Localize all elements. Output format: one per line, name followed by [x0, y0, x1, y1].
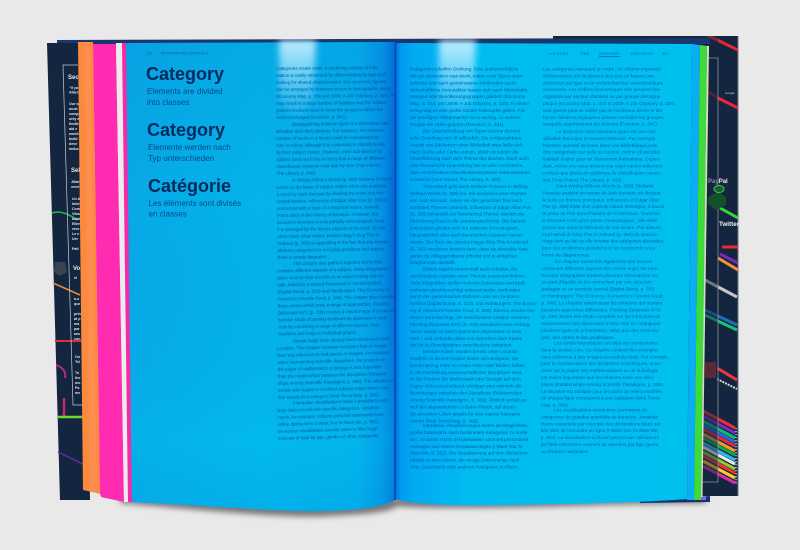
text column: english: bear any reference to real places or images. For instance, — [277, 350, 391, 358]
text column: english: by their subject matter. However, even sub-division by — [276, 149, 383, 155]
text column: german: Gruppe die Opfer gehören (Function, S. 341). — [410, 122, 505, 127]
back page: left side map — [47, 43, 90, 500]
text fragments: Jilian — [71, 180, 80, 184]
text fragments: mo — [75, 381, 81, 385]
text column: german: reiche Studie zu falsch parkenden Diplomaten in New — [410, 329, 522, 334]
text column: french: confuse que plusieurs systèmes de classification coexis- — [542, 170, 662, 176]
text column: french: un pied d'égalité en les connectant par une structure — [542, 280, 652, 286]
text column: french: surtout aux aspects littéraires de son œuvre. Par ailleurs, — [542, 225, 662, 231]
text fragments: Sel — [71, 168, 80, 174]
text column: german: Papier nicht entscheidend, wichtiger sind vielmehr die — [410, 384, 522, 389]
text column: german: die beteiligten Militärmächte ist es wichtig, zu welcher — [410, 115, 521, 120]
heading group: german: Elemente werden nach — [148, 143, 231, 152]
text column: french: l'énorme quantité de livres dans une bibliothèque peut — [543, 143, 657, 149]
text fragments: at p — [74, 317, 81, 321]
text column: english: online dating sites (I Want You To Want Me, p. 352). — [278, 419, 379, 427]
text fragments: Albert — [69, 90, 80, 94]
text column: german: lung jedoch gliedert sich nur teilweise chronologisch, — [410, 226, 519, 231]
text column: french: est moins importante que les relations entre ces disci- — [541, 375, 655, 381]
text fragments: "If you — [69, 86, 80, 90]
text column: english: Location. This chapter contains examples that no longer — [277, 343, 388, 351]
text column: german: sche Einteilung und oft willkürlich. Die unübersehbare — [410, 135, 522, 140]
text column: german: Klassifizierung nach dem Thema des Buches. Doch auch — [410, 156, 529, 161]
text column: english: combine different aspects of a subject. Many infographics — [277, 266, 391, 273]
text column: german: zentralen Themen unterteilt. Influences of Edgar Allan Poe — [410, 205, 531, 210]
page edge: fore-edge strip — [687, 44, 700, 500]
text fragments: bank — [72, 217, 80, 221]
text column: english: (Digital Dump, p. 333) and Hamburgers: The Economy of — [278, 287, 390, 294]
text column: french: des sites de rencontre en ligne (I Want You To Want Me, — [541, 428, 659, 434]
text fragments: a.o — [74, 297, 80, 301]
text column: english: side, linked by a shared framework or central symbol — [277, 280, 381, 287]
text fragments: feedb — [69, 122, 79, 126]
navigation header — [549, 52, 669, 57]
text column: german: Serien berücksichtigt, die verschiedene Ansätze vereinen. — [410, 315, 530, 320]
text column: german: Interaktive Visualisierungen bieten die Möglichkeit, — [423, 423, 528, 428]
map dimming overlay — [700, 36, 718, 496]
text column: french: Les visualisations interactives permettent de — [554, 408, 648, 414]
text fragments: deve — [69, 142, 77, 146]
text column: french: gies, des cartes et des graphiques. — [541, 335, 615, 341]
text column: german: gorien für Alltagsprobleme erfindet und in einfachen — [410, 253, 517, 258]
page edge: pale — [701, 46, 709, 497]
text column: french: ou d'autres catégories. — [541, 449, 589, 455]
text column: french: Dans Writing Without Words (p. 396), Stefanie — [556, 184, 654, 190]
text column: french: sans référence à des images ou endroits réels. Par exemple, — [541, 354, 669, 360]
text column: german: erlaubt es dem Nutzer, die riesige Datenmenge nach — [410, 458, 520, 463]
text column: english: Interactive visualisations make it possible to sort — [293, 398, 388, 406]
text column: english: may result in a large number of fatalities and the military — [276, 100, 387, 106]
text column: french: distinction par type et en recherchant les caractéristiques — [543, 80, 663, 86]
text fragments: world — [68, 132, 79, 136]
text column: french: dant, même une sous-division par sujet s'avère tellement — [542, 164, 663, 170]
text column: english: similar with regard to modified subway maps where each — [278, 385, 390, 393]
text column: german: verschiedene Aspekte eines Themas zusammenführen. — [410, 273, 525, 278]
text column: english: In Writing Without Words (p. 396) Stefanie Posavec — [292, 176, 394, 183]
text column: english: Harris, for example, collects personal statements from — [277, 412, 384, 420]
text fragments: aid e — [69, 127, 77, 131]
text column: german: Mentale Karten wurden bereits unter Location — [423, 349, 518, 354]
heading group: french: Les éléments sont divisés — [148, 199, 241, 208]
text fragments: con — [74, 337, 80, 341]
text fragments: Sec — [68, 75, 79, 81]
text fragments: Inter — [72, 202, 80, 206]
text fragments: build — [69, 137, 78, 141]
text column: german: Wirtschaftliche Kennzahlen lassen sich nach Wirtschafts- — [410, 87, 529, 92]
text column: german: nach Größe oder Farbe ordnen, üblich ist jedoch die — [410, 149, 519, 154]
text column: french: où chaque ligne correspond à une catégorie (Web Trend — [541, 396, 660, 402]
text fragments: the — [75, 376, 80, 380]
text column: german: Beziehungen zwischen den Disziplinen (Relationships — [410, 391, 523, 396]
text column: english: York by combining a range of different layouts, from — [278, 322, 380, 329]
book shadow — [120, 498, 706, 517]
text fragments: verei — [71, 185, 79, 189]
text fragments: Vo — [73, 266, 81, 272]
text column: german: eine thematische Unterteilung hat so viele Unschärfen, — [410, 163, 524, 168]
map lines: upper — [705, 35, 738, 389]
text column: german: Thematisch geht auch Stefanie Posavec in Writing — [423, 184, 528, 189]
text column: french: (p. 336) illustre une étude complète sur les infractions de — [541, 314, 661, 320]
text column: english: them in simple diagrams. — [278, 254, 327, 260]
text fragments: comp — [69, 112, 79, 116]
text column: french — [541, 66, 676, 455]
text fragments: ass — [74, 332, 80, 336]
text column: french: Une guerre peut se solder par de nombreux décès et les — [543, 108, 662, 114]
text column: french: pour des problèmes quotidiens et les représente sous — [542, 246, 656, 252]
label: PayPal: PayPal — [708, 179, 728, 185]
text column: english: a novel by Jack Kerouac by dividing the entire text into — [277, 190, 384, 197]
page edges: pink — [93, 44, 124, 502]
heading group: french: Catégorie — [148, 176, 231, 196]
text column: german: zweigen oder Bevölkerungsgruppen gliedern (Economy — [410, 94, 526, 99]
text column: french: tent (Your Friend, The Library, p. 400). — [542, 177, 623, 183]
text column: english: This chapter also gathers together works that — [293, 259, 383, 266]
text column: german: hauptsächlich aber nach literarischen Aspekten seines — [410, 233, 523, 238]
text column: english: central themes. Influences of Edgar Allan Poe (p. 358) is — [277, 197, 388, 204]
text column: german: stehen (Web Trend Map, S. 366). — [410, 418, 479, 423]
text column: english: other hand, what makes Jessica Hagy's blog This is — [277, 232, 380, 239]
text column: french: Posavec analyse un roman de Jack Kerouac en divisant — [542, 190, 661, 196]
heading group: english: Elements are divided — [147, 87, 223, 96]
text column: french: plines (Relationships Among Scientific Paradigms, p. 368). — [541, 382, 664, 388]
text column: german: my of America's Favorite Food, S. 346). Ebenso werden hier — [410, 308, 536, 313]
text fragments: Un Al — [72, 197, 81, 201]
text column: french: plusieurs approches différentes. Flocking Diplomats NYC — [541, 307, 662, 313]
text column: german: (S. 358) behandelt ein historisches Thema, nämlich die — [410, 212, 525, 217]
navigation header: HIERARCHY — [631, 52, 654, 56]
text column: english: the paper of mathematics or biology is less important — [278, 364, 382, 372]
text column: french: d'informations est facilement structuré en faisant une — [543, 73, 654, 79]
text column: german: Alter, Geschlecht oder anderen Kategorien zu filtern. — [410, 465, 519, 470]
text column: english — [276, 65, 400, 441]
label: Google: Google — [725, 91, 735, 95]
text fragments: par — [74, 327, 80, 331]
icon: red block — [705, 362, 716, 378]
panel: left page — [126, 40, 400, 511]
heading group: english: into classes — [147, 98, 189, 107]
text column: french: sition sur le papier des mathématiques ou de la biologie — [541, 368, 659, 374]
heading group: english: Category — [146, 64, 224, 84]
text column: french: catégoriser de grandes quantités de données. Jonathan — [541, 414, 659, 420]
text fragments: prin — [74, 312, 81, 316]
text column: english: place several data records on an equal footing side by — [277, 273, 384, 280]
text column: english: victims belonged (Function, p. 341). — [276, 114, 347, 120]
spine — [394, 42, 396, 500]
text column: french: Poe (p. 358) traite d'un sujet de nature historique, à savoir — [542, 204, 665, 210]
text column: french: Hagy tient au fait qu'elle invente des catégories abstraites — [542, 239, 664, 245]
text column: english: On-screen visualisation permits users to filter huge — [278, 426, 378, 434]
text column: english: classification systems exist side by side (Your Friend, — [276, 163, 381, 169]
page edges: orange — [78, 42, 101, 494]
text column: english: than the relationships between the disciplines (Relation- — [278, 371, 388, 379]
text fragments: Uer — [72, 237, 79, 241]
text fragments: Tel — [75, 360, 80, 364]
text column: english: size or colour, although it is customary to classify books — [276, 142, 386, 148]
page edges: white gap — [116, 43, 128, 502]
text fragments: me — [75, 391, 80, 395]
text column: french: tout l'attrait du blog This is Indexed (p. 360) de Jessica — [542, 232, 657, 238]
panel: right page — [395, 40, 709, 505]
text column: french: auxquels appartiennent les victimes (Function, p. 341). — [543, 122, 658, 128]
back page: right side map — [553, 35, 740, 496]
text fragments: Vikas — [72, 212, 81, 216]
text column: german: Flocking Diplomats NYC (S. 336) visualisiert eine umfang- — [410, 322, 531, 327]
text column: english: number of books in a library could be categorised by — [276, 135, 380, 141]
text column: german: In der Darstellung wissenschaftlicher Disziplinen etwa — [410, 370, 522, 375]
text column: english: looking for shared characteristics. Key economic figures — [276, 79, 387, 85]
text column: german: Viele Infografiken stellen mehrere Datensätze und Maß- — [410, 280, 527, 285]
text column: english: sification and often arbitrary. For instance, the immense — [276, 128, 386, 134]
text column: french: plusieurs types de présentation, telles que des chronolo- — [541, 328, 660, 334]
text column: french: phique (Economy Map, p. 334 et 2009: A Job Odyssey, p. 325). — [543, 101, 676, 107]
heading group: english — [146, 64, 224, 107]
text fragments: el — [74, 276, 77, 280]
text column: german: Anzahl von Büchern in einer Bibliothek etwa ließe sich — [410, 142, 523, 147]
text fragments: Com — [72, 207, 80, 211]
text column: german: Krieg mag es eine große Anzahl Todesopfer geben. Für — [410, 108, 526, 113]
page edges: orange highlight — [84, 42, 97, 493]
cover top edge — [57, 38, 710, 44]
map lines — [52, 212, 85, 465]
text column: german: von Jack Kerouac, indem sie den gesamten Text nach — [410, 198, 523, 203]
text column: german: durch den gemeinsamen Rahmen oder ein zentrales — [410, 294, 520, 299]
text column: english: Diplomats NYC (p. 336) creates a visual image of a compre- — [278, 308, 397, 315]
text column: french: breuses infographies mettent plusieurs informations sur — [542, 273, 659, 279]
text column: french: et Hamburgers: The Economy of America's Favorite Food, — [542, 294, 664, 300]
page edge: green — [694, 45, 707, 500]
page edges: pink strip — [122, 43, 133, 502]
text column: english: these series which unite a range of approaches. Flocking — [278, 301, 390, 308]
text fragments: indus — [69, 147, 79, 151]
text column: french: Map, p. 366). — [541, 403, 569, 409]
header: page number and section: 322 INFORMATION GRAPHICS — [146, 51, 209, 55]
text column: french: Les cartes heuristiques ont déjà été mentionnées — [554, 340, 658, 346]
text column: german: große Datensätze nach bestimmten Kategorien zu sortie- — [410, 430, 529, 435]
text column: german: Einordnung Poes in die Literaturgeschichte. Die Darstel- — [410, 219, 527, 224]
text column: german: Menge strukturiert man leicht, indem man Typen unter- — [410, 73, 524, 78]
map frame line — [702, 58, 718, 482]
text fragments: Ellen — [72, 222, 81, 226]
text column: french: stationnement des diplomates à New York en conjuguant — [541, 321, 661, 327]
text column: french: La distinction entre plusieurs types est une clas- — [556, 129, 658, 135]
text column: english: timelines and maps to individual graphs. — [278, 330, 357, 336]
text column: german: dass verschiedene Klassifikationssysteme nebeneinander — [410, 170, 531, 175]
text column: german: York – und verbindet dabei von Zeitreihen über Karten — [410, 336, 523, 341]
text frame — [63, 65, 85, 405]
text fragments: Le e — [72, 232, 79, 236]
glare — [279, 40, 316, 125]
text column: french: combinant différents aspects d'un même sujet. De nom- — [542, 266, 659, 272]
heading group: german: Category — [147, 120, 225, 140]
cover bottom edge — [640, 496, 710, 503]
label: Twitter: Twitter — [719, 221, 740, 228]
text column: german: bis hin zu Einzelgraphen verschiedene Varianten. — [410, 343, 513, 348]
text column: english: ships Among Scientific Paradigms, p. 368). The situation is — [278, 378, 394, 386]
text column: german: Map, S. 334, und 2009: A Job Odyssey, S. 325). In einem — [410, 101, 529, 106]
text column: english: line stands for a category (Web Trend Map, p. 366). — [278, 392, 380, 400]
text column: english: Categories create order. A confusing volume of infor- — [276, 65, 380, 71]
text column: german: Without Words (S. 396) vor. Sie analysiert einen Roman — [410, 191, 527, 196]
text fragments: ma — [74, 322, 80, 326]
text column: french: de filtrer d'énormes volumes de données par âge, genre — [541, 442, 659, 448]
text column: french: organisés par secteur d'activité ou par groupe démogra- — [543, 94, 661, 100]
text column: english: Indexed (p. 360) so appealing is the fact that she invents — [277, 239, 390, 246]
text fragments: To — [75, 371, 80, 375]
text fragments: Pati — [72, 247, 79, 251]
text column: german: Want Me, S. 352). Die Visualisierung auf dem Bildschirm — [410, 451, 528, 456]
icon: green cube — [708, 186, 726, 210]
text fragments: must — [69, 107, 78, 111]
text column: french: p. 352). La visualisation à l'écran permet aux utilisateurs — [541, 435, 659, 441]
text column: french: dans la section Lieu. Ce chapitre contient des exemples — [541, 347, 659, 353]
glare — [439, 40, 476, 125]
text column: german: ist die Position der Mathematik oder Biologie auf dem — [410, 377, 521, 382]
text fragments: vers — [72, 227, 79, 231]
text fragments: Our w — [69, 102, 79, 106]
text column: german: sich bei abgewandelten U-Bahn-Plänen, auf denen — [410, 404, 516, 409]
text column: english: subject turns out to be so fuzzy that a range of different — [276, 156, 385, 162]
text column: french: Ce chapitre rassemble également des œuvres — [555, 259, 653, 265]
text column: german: Die Unterscheidung von Typen ist eine theoreti- — [423, 128, 522, 134]
text column: german: Kategorien schaffen Ordnung. Eine unübersichtliche — [410, 66, 519, 72]
text column: english: large data records into specific categories. Jonathan — [277, 405, 380, 413]
text fragments: only a — [69, 117, 80, 121]
text column: german: (S. 360) wiederum besteht darin, dass sie abstrakte Kate- — [410, 246, 530, 251]
text column: german: keinen Bezug mehr zu realen Orten oder Bildern haben. — [410, 363, 526, 368]
text column: german — [410, 66, 538, 470]
text column: english: when representing scientific disciplines, the position on — [277, 357, 386, 365]
row end dots — [735, 428, 737, 484]
text column: french: habituel d'opter pour un classement thématique. Cepen- — [542, 157, 661, 163]
text column: french: La situation est similaire pour les plans de métro modifiés, — [541, 389, 663, 395]
text column: english: account's structure is only partially chronological; most — [277, 218, 385, 225]
text column: german: erwähnt. In diesem Kapitel finden sich Beispiele, die — [410, 356, 519, 361]
text column: french: pour la représentation des disciplines scientifiques, la po- — [541, 361, 662, 367]
text column: german: scheidet und nach gemeinsamen Merkmalen sucht. — [410, 80, 517, 85]
navigation header: LOCATION — [549, 52, 569, 56]
heading group: french — [148, 176, 241, 218]
text column: english: Distinguishing between types is a theoretical clas- — [292, 121, 390, 127]
text column: english: it is arranged by the literary aspects of his work. On the — [277, 225, 386, 232]
text column: french: sification théorique et souvent arbitraire. Par exemple, — [543, 136, 657, 142]
text column: german: Symbol (Digital Dump, S. 333), und Hamburgers: The Econo- — [410, 301, 538, 306]
text column: german: existieren (Your Friend, The Library, S. 400). — [410, 177, 502, 182]
text column: french: être catégorisée par taille ou couleur, même s'il est plus — [543, 150, 660, 156]
text fragments: que — [74, 302, 80, 306]
text column: english: hensive study of parking violations by diplomats in New — [278, 315, 387, 322]
text column: english: (Economy Map, p. 334 and 2009: A Job Odyssey, p. 325). War — [276, 93, 399, 99]
text column: german: Among Scientific Paradigms, S. 368). Ähnlich verhält es — [410, 397, 527, 403]
text column: english: America's Favorite Food, p. 346). The chapter also considers — [278, 294, 398, 301]
text column: english: abstract categories for everyday problems and depicts — [278, 246, 385, 253]
navigation header: 323 — [662, 52, 669, 56]
text column: english: powers involved need to know the groups to which the — [276, 107, 383, 113]
text column: german: Aussagen aus Online-Kontaktanzeigen (I Want You To — [410, 444, 523, 449]
text column: german: Dieses Kapitel versammelt auch Arbeiten, die — [423, 266, 518, 272]
purple page edge — [700, 496, 706, 500]
text column: german: Diagrammen darstellt. — [410, 260, 456, 265]
text column: english: can be arranged by business sector or demographic group — [276, 86, 392, 92]
text column: german: einheiten gleichberechtigt nebeneinander, verbunden — [410, 287, 521, 292]
text fragments: Pa — [75, 386, 80, 390]
navigation header: CATEGORY — [599, 52, 620, 56]
text column: german: Werks. Der Reiz von Jessica Hagys Blog This is Indexed — [410, 239, 528, 244]
navigation header: TIME — [580, 52, 590, 56]
text column: french: partagée ou un symbole central (Digital Dump, p. 333 — [542, 287, 654, 293]
text column: french: forme de diagrammes. — [542, 252, 590, 258]
icon: small emblem — [54, 262, 67, 276]
text column: english: concerned with a topic of a historical nature, namely — [277, 204, 380, 211]
text column: german: die einzelnen Linien jeweils für eine eigene Kategorie — [410, 411, 521, 416]
rainbow lines — [703, 411, 735, 483]
heading group: german: Typ unterschieden — [148, 154, 214, 163]
text column: french: Les catégories marquent un ordre. Un volume important — [543, 66, 661, 72]
text column: english: Poe's place in the history of literature. However, the — [277, 211, 379, 218]
text fragments — [68, 75, 81, 395]
heading group: german — [147, 120, 231, 163]
text column: french: la place de Poe dans l'histoire de la littérature. Toutefois, — [542, 211, 661, 217]
text column: english: The Library, p. 400). — [277, 170, 316, 176]
text column: english: volumes of data by age, gender or other categories. — [278, 433, 380, 441]
text column: english: works on the basis of subject matter when she analyses — [277, 183, 387, 190]
text column: french: la structure n'est qu'en partie chronologique ; elle obéit — [542, 218, 658, 224]
text column: french: forces militaires impliquées doivent connaître les groupes — [543, 115, 664, 121]
text column: english: mation is easily structured by differentiating by type and — [276, 72, 386, 78]
text column: english: Mental maps have already been mentioned under — [293, 336, 391, 344]
text fragments: On — [75, 355, 80, 359]
text column: french: le texte en thèmes principaux. Influences of Edgar Allan — [542, 197, 660, 203]
text column: french: communes. Les chiffres économiques clés peuvent être — [543, 87, 660, 93]
text column: french: p. 346). Le chapitre retient aussi les créations qui marient — [542, 300, 663, 306]
heading group: french: en classes — [148, 210, 187, 218]
text column: german: ren. Jonathan Harris beispielsweise sammelt persönliche — [410, 437, 529, 442]
text column: french: Harris rassemble par exemple des déclarations faites sur — [541, 421, 661, 427]
